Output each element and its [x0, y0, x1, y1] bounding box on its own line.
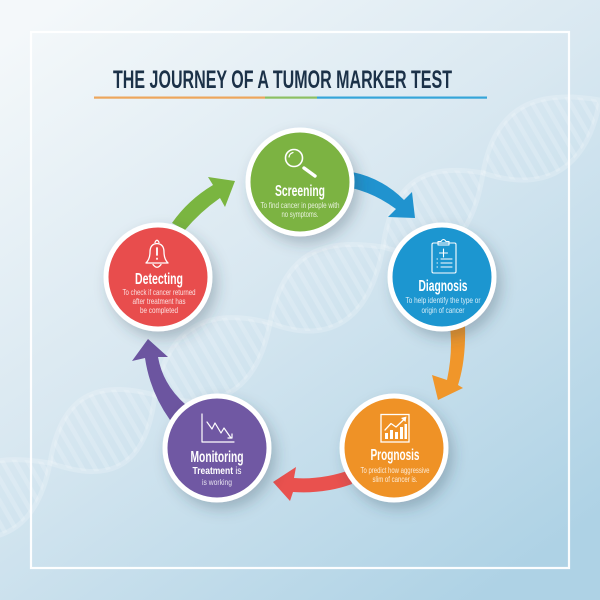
description: detecting: To check if cancer returned	[122, 287, 196, 297]
panel: screening	[248, 130, 352, 234]
DNA helix watermark	[0, 97, 600, 539]
description: screening: To find cancer in people with	[260, 200, 340, 210]
arrow: prognosis to monitoring	[273, 467, 352, 501]
description: detecting: after treatment has	[132, 296, 186, 306]
description: prognosis: slim of cancer is.	[372, 474, 418, 484]
arrow: detecting to screening	[172, 177, 235, 230]
icon: alert bell	[146, 240, 168, 267]
heading: screening: Screening	[275, 183, 325, 200]
arrow: monitoring to detecting	[132, 339, 186, 420]
description: prognosis: To predict how aggressive	[360, 465, 430, 475]
arrow: screening to diagnosis	[352, 172, 415, 218]
icon: rising chart	[381, 414, 409, 442]
heading: monitoring: Monitoring	[190, 449, 244, 466]
panel: detecting	[106, 225, 210, 329]
heading: detecting: Detecting	[135, 271, 183, 288]
title underline	[94, 96, 487, 99]
description: monitoring: is working	[202, 477, 232, 487]
icon: clipboard	[432, 240, 456, 273]
description: diagnosis: To help identify the type or	[406, 295, 481, 305]
panel: monitoring	[165, 396, 269, 500]
panel: prognosis	[342, 396, 446, 500]
description: monitoring	[192, 465, 242, 487]
description: screening: no symptoms.	[282, 209, 318, 219]
panel: diagnosis	[390, 225, 494, 329]
heading: diagnosis: Diagnosis	[418, 278, 468, 295]
description: diagnosis: origin of cancer	[422, 305, 465, 315]
arrow: diagnosis to prognosis	[432, 326, 465, 400]
heading: prognosis: Prognosis	[370, 447, 420, 464]
icon: falling line chart	[202, 414, 234, 442]
description: monitoring: Treatment is	[192, 465, 242, 477]
description: detecting: be completed	[140, 305, 178, 315]
icon: magnifying glass	[286, 150, 315, 176]
